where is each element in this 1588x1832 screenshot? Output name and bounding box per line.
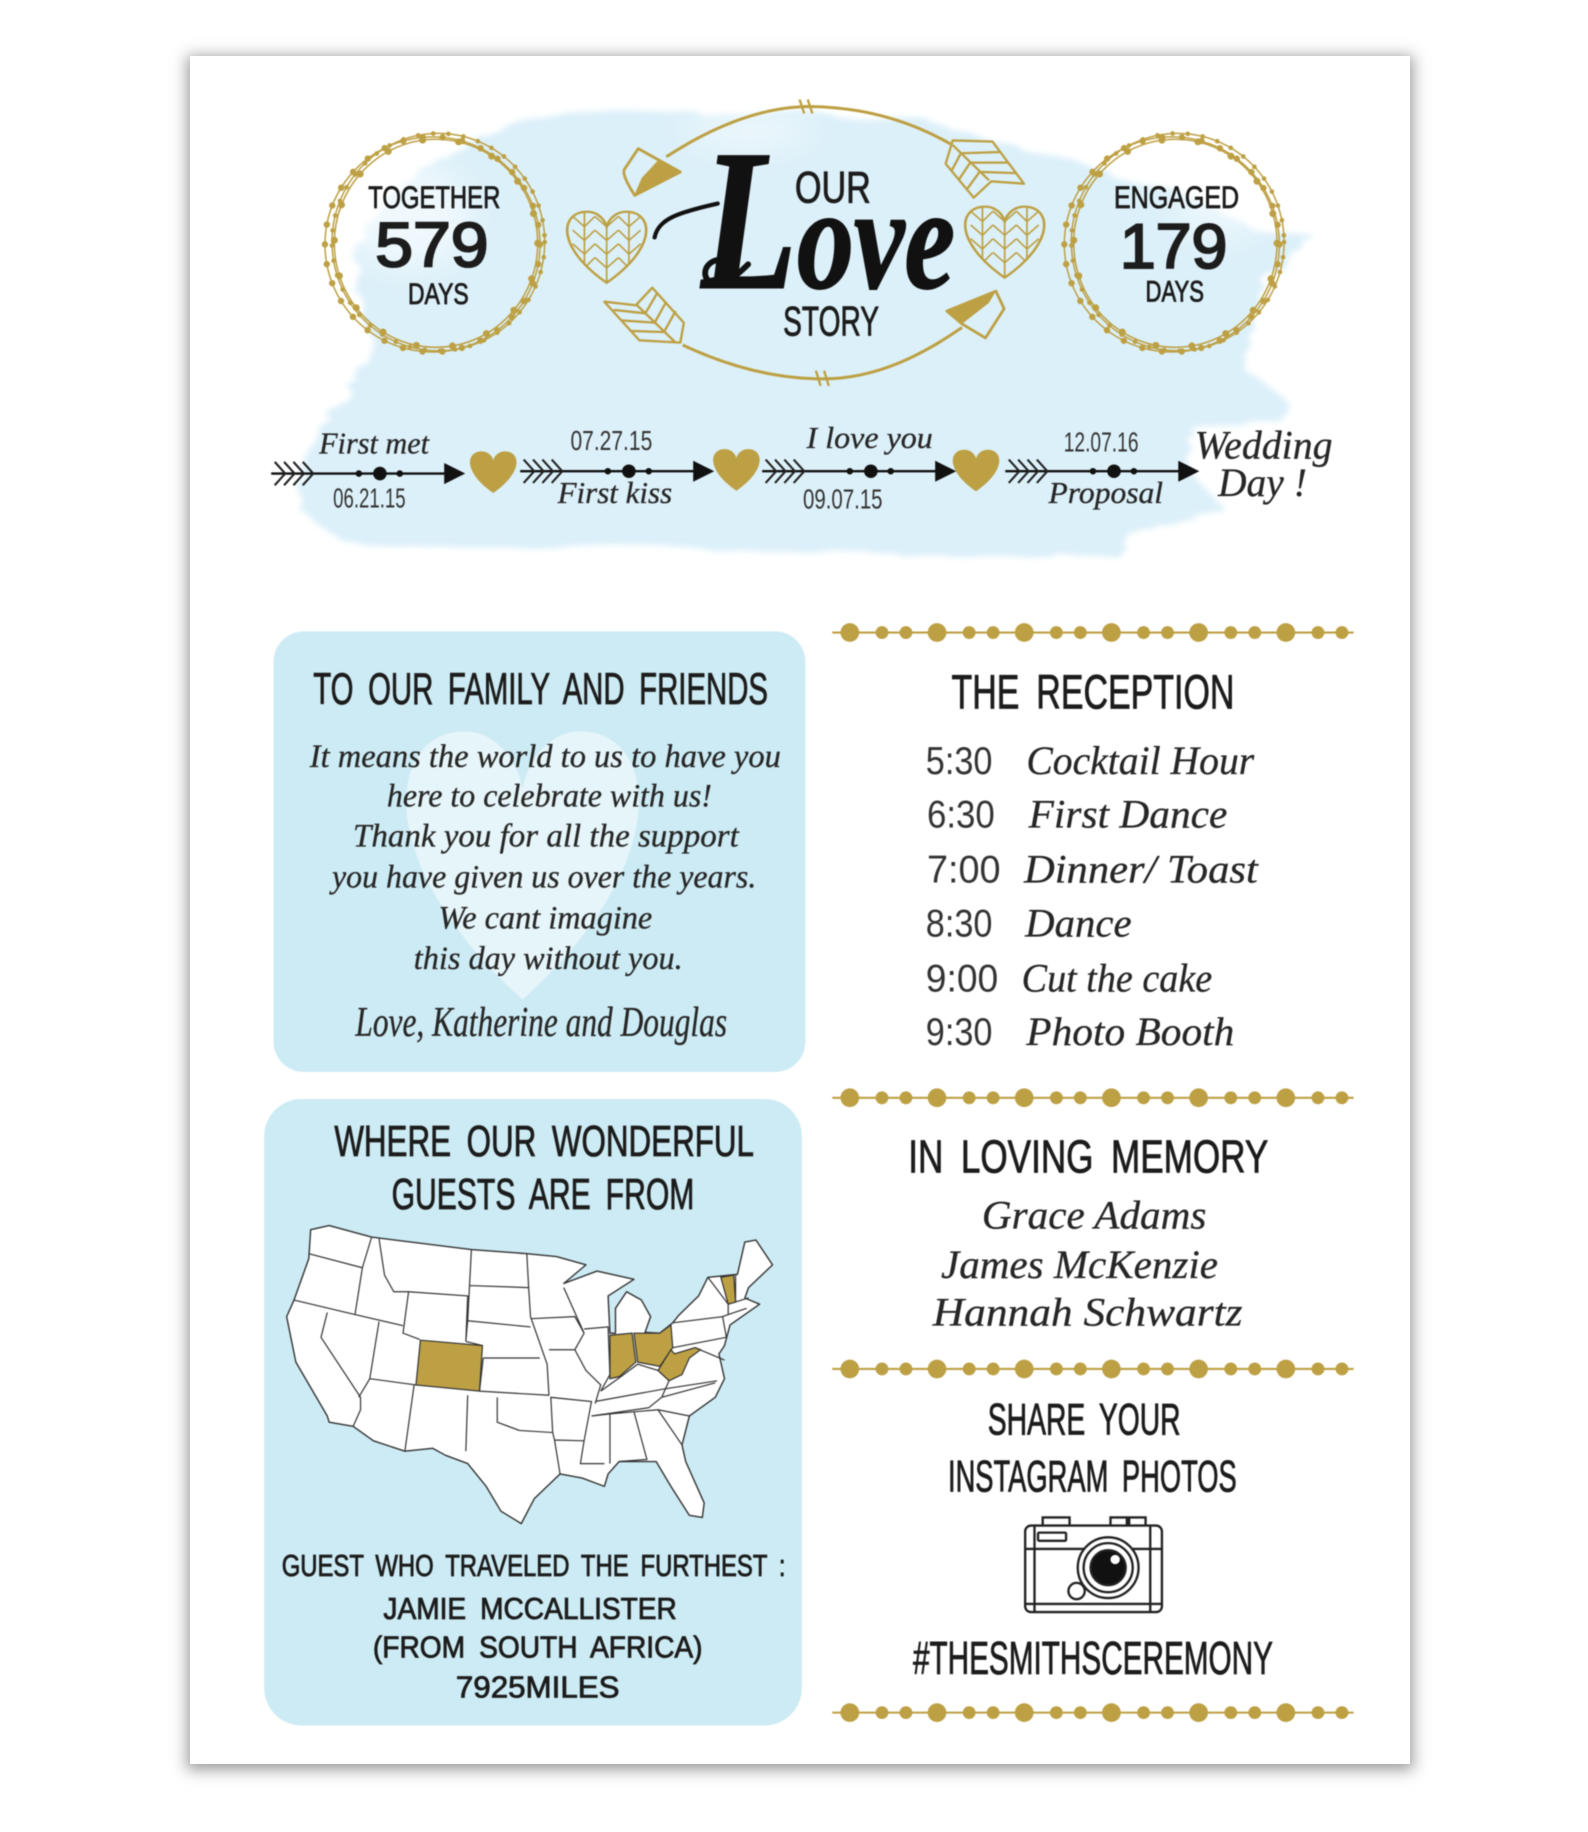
timeline	[271, 421, 1333, 515]
furthest guest text: 7925MILES	[456, 1670, 620, 1704]
icon: upper feather	[946, 140, 1024, 198]
heading: THE RECEPTION	[952, 667, 1234, 720]
message text: It means the world to us to have you	[309, 739, 781, 775]
wreath: together counter: 579	[375, 211, 489, 281]
schedule: Cocktail Hour	[1026, 739, 1255, 783]
furthest guest text: JAMIE MCCALLISTER	[383, 1592, 677, 1626]
icon: lower feather	[604, 288, 684, 343]
bead divider	[832, 623, 1354, 642]
schedule: Photo Booth	[1025, 1010, 1234, 1054]
title: our love story	[655, 110, 955, 345]
colorado highlighted	[416, 1340, 482, 1391]
message text: here to celebrate with us!	[387, 779, 712, 815]
indiana highlighted	[610, 1333, 636, 1379]
schedule: 5:30	[926, 740, 992, 783]
section: in loving memory	[908, 1131, 1268, 1335]
schedule: Dinner/ Toast	[1023, 848, 1259, 892]
milestone: first kiss: 07.27.15	[570, 425, 652, 456]
wreath: engaged counter: DAYS	[1146, 277, 1204, 309]
message text: this day without you.	[414, 941, 683, 977]
section: share instagram photos: SHARE YOUR	[988, 1395, 1181, 1444]
wreath: engaged counter: 179	[1120, 212, 1227, 282]
arrow hoop frame	[604, 99, 1024, 386]
wreath: engaged counter	[1064, 133, 1284, 352]
message text	[309, 739, 781, 977]
icon: left knit heart	[567, 212, 646, 283]
section: the reception	[926, 667, 1259, 1054]
schedule: 6:30	[927, 794, 995, 837]
schedule: Cut the cake	[1022, 956, 1212, 1000]
schedule	[926, 739, 1259, 1054]
icon: lower arrowhead	[947, 291, 1004, 338]
furthest guest text: GUEST WHO TRAVELED THE FURTHEST :	[282, 1549, 786, 1583]
wreath: together counter	[325, 133, 545, 352]
section: share instagram photos: #THESMITHSCEREMONY	[913, 1632, 1273, 1684]
wreath: together counter: DAYS	[408, 279, 469, 311]
icon: camera	[1025, 1517, 1162, 1612]
heading: GUESTS ARE FROM	[392, 1171, 694, 1219]
paper sheet	[190, 56, 1410, 1764]
schedule: First Dance	[1028, 793, 1227, 837]
milestone: wedding day: Day !	[1217, 461, 1307, 505]
section: in loving memory: Grace Adams	[982, 1194, 1206, 1238]
bead divider	[832, 1360, 1354, 1378]
message text: you have given us over the years.	[329, 859, 756, 895]
panel: to our family and friends	[274, 631, 805, 1072]
bead divider	[832, 1703, 1354, 1722]
milestone: first kiss	[520, 425, 714, 510]
milestone: wedding day	[1195, 423, 1333, 505]
milestone: proposal: Proposal	[1047, 476, 1163, 510]
milestone: first kiss: First kiss	[557, 476, 672, 510]
schedule: 9:00	[926, 957, 998, 1000]
icon: right knit heart	[965, 207, 1044, 278]
milestone: proposal: 12.07.16	[1064, 426, 1139, 457]
title: our love story: OUR	[795, 163, 871, 212]
icon: gold heart	[470, 451, 517, 493]
milestone: first met: 06.21.15	[333, 482, 406, 513]
section: share instagram photos: INSTAGRAM PHOTOS	[948, 1453, 1237, 1502]
icon: white heart	[406, 731, 639, 1000]
schedule: 8:30	[926, 902, 992, 945]
title: our love story: STORY	[783, 298, 879, 345]
icon: upper arrowhead	[624, 149, 680, 195]
message text: We cant imagine	[438, 900, 652, 936]
us map	[287, 1226, 773, 1524]
schedule: 9:30	[926, 1011, 992, 1054]
schedule: Dance	[1024, 901, 1132, 945]
title: our love story: Love	[700, 110, 955, 332]
watercolor wash background	[299, 108, 1319, 558]
section: share instagram photos	[913, 1395, 1273, 1684]
vermont highlighted	[721, 1275, 736, 1304]
panel: guests map	[264, 1099, 802, 1725]
section: in loving memory: Hannah Schwartz	[932, 1291, 1243, 1335]
west virginia highlighted	[658, 1348, 700, 1381]
wreath: engaged counter: ENGAGED	[1114, 179, 1239, 215]
milestone: first met	[271, 427, 465, 513]
heading: WHERE OUR WONDERFUL	[334, 1118, 754, 1166]
furthest guest text: (FROM SOUTH AFRICA)	[373, 1631, 703, 1665]
section: in loving memory: IN LOVING MEMORY	[908, 1131, 1268, 1183]
section: in loving memory: James McKenzie	[941, 1243, 1218, 1287]
soft highlights in the wash	[345, 115, 1268, 269]
signature: Love, Katherine and Douglas	[355, 1000, 727, 1046]
bead divider	[832, 1088, 1354, 1107]
milestone: i love you: I love you	[806, 421, 933, 455]
milestone: i love you	[762, 421, 956, 515]
heading	[334, 1118, 754, 1219]
milestone: i love you: 09.07.15	[803, 484, 883, 515]
message text: Thank you for all the support	[353, 818, 740, 854]
furthest guest text	[282, 1549, 786, 1704]
heading: TO OUR FAMILY AND FRIENDS	[313, 665, 768, 714]
icon: gold heart	[953, 450, 999, 491]
wreath: together counter: TOGETHER	[368, 179, 500, 215]
schedule: 7:00	[927, 849, 1001, 892]
milestone: proposal	[1005, 426, 1199, 510]
milestone: wedding day: Wedding	[1195, 423, 1333, 467]
milestone: first met: First met	[318, 427, 431, 461]
icon: gold heart	[713, 449, 760, 491]
ohio highlighted	[634, 1325, 673, 1366]
